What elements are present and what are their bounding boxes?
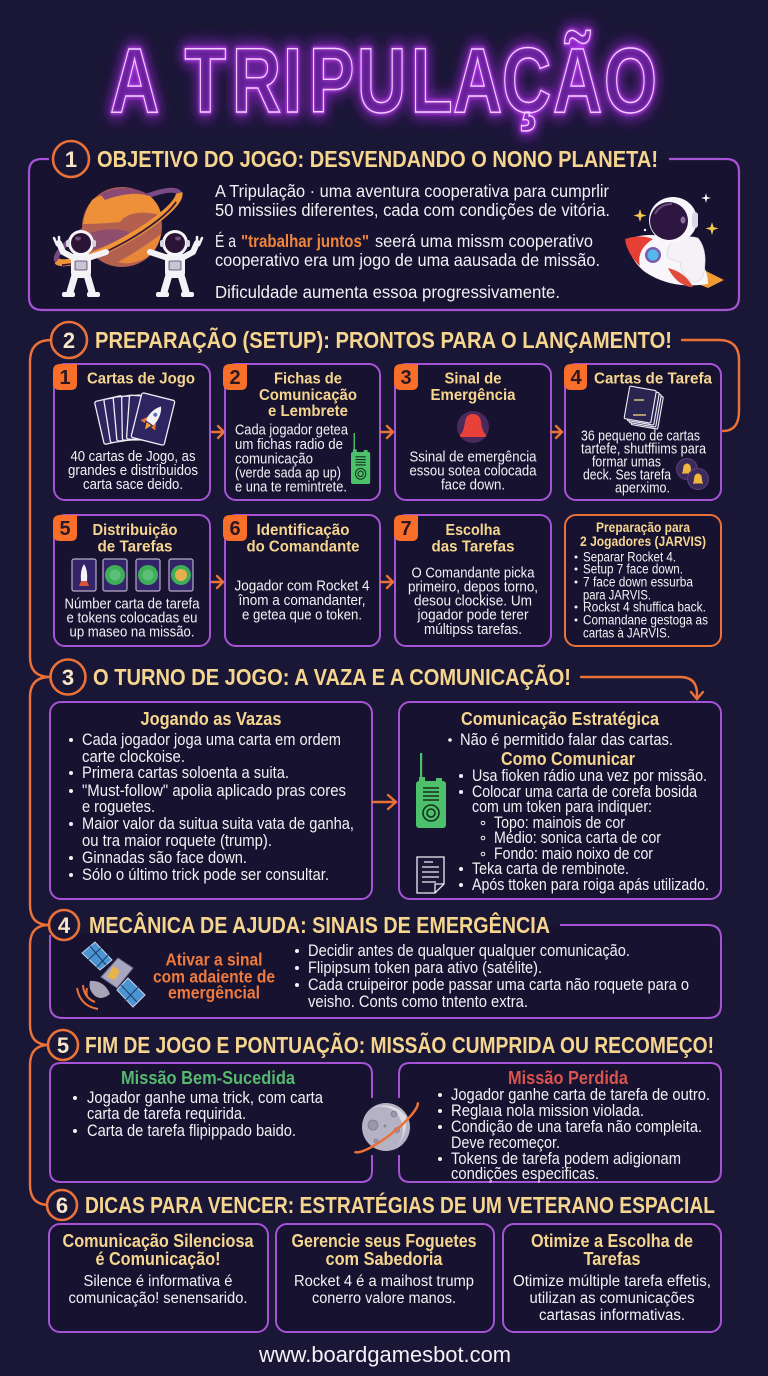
tip text <box>513 1273 711 1324</box>
panel: tip 2 <box>276 1224 494 1332</box>
bullet list <box>295 941 689 1011</box>
tip text <box>68 1273 248 1307</box>
card title: Distribuição <box>92 522 178 539</box>
arrow <box>551 426 562 438</box>
bullet list: 7 face down essurba <box>583 574 693 590</box>
bullet list: Sólo o último trick pode ser consultar. <box>82 865 329 884</box>
panel: tip 3 <box>503 1224 721 1332</box>
bullet list <box>459 766 709 894</box>
title: A TRIPULAÇÃO <box>110 29 657 132</box>
card text <box>408 566 538 638</box>
panel title: Jogando as Vazas <box>140 708 282 729</box>
panel: comunicação estratégica <box>399 702 721 899</box>
section number <box>49 910 79 940</box>
card text: Jogador com Rocket 4 <box>234 578 370 594</box>
panel title: Gerencie seus Foguetes <box>292 1230 476 1251</box>
bullet list: condições especificas. <box>451 1164 599 1183</box>
card text: înom a comandanter, <box>238 593 366 609</box>
panel title: Tarefas <box>584 1248 640 1269</box>
card title <box>432 522 515 556</box>
arrow <box>381 576 393 588</box>
section heading: MECÂNICA DE AJUDA: SINAIS DE EMERGÊNCIA <box>89 911 550 938</box>
icon: card fan <box>94 393 175 445</box>
bullet list: Carta de tarefa flipippado baido. <box>87 1121 296 1140</box>
connector: right bracket <box>682 340 739 431</box>
bullet list: Comandane gestoga as <box>583 612 708 628</box>
step badge <box>394 364 418 390</box>
bullet list: Usa fioken rádio una vez por missão. <box>472 766 707 785</box>
intro text: É a <box>215 231 236 251</box>
bullet list: com um token para indiquer: <box>472 797 652 816</box>
icon: mini task cards <box>72 559 193 591</box>
card text <box>581 428 707 496</box>
bullet list: Flipipsum token para ativo (satélite). <box>308 958 542 977</box>
intro text: cooperativo era um jogo de uma aausada de missão. <box>215 250 600 270</box>
section 5: fim de jogo <box>48 1030 721 1183</box>
bullet list: Decidir antes de qualquer qualquer comunicação. <box>308 941 630 960</box>
arrow <box>212 426 224 438</box>
card title: Sinal de <box>444 370 502 388</box>
card text: essou sotea colocada <box>410 464 537 480</box>
bullet list: carta de tarefa requirida. <box>87 1104 246 1123</box>
card title <box>430 370 516 404</box>
bullet list: cartas à JARVIS. <box>583 626 670 640</box>
bullet list: "Must-follow" apolia aplicado pras cores <box>82 781 346 800</box>
card text <box>410 450 537 494</box>
card text: 36 pequeno de cartas <box>581 428 700 444</box>
card title: Emergência <box>430 387 516 404</box>
card title: Cartas de Jogo <box>87 370 195 388</box>
panel title: é Comunicação! <box>96 1248 220 1269</box>
arrow <box>381 426 393 438</box>
card text: grandes e distribuidos <box>68 463 198 479</box>
card text <box>234 578 370 624</box>
card 4: cartas de tarefa <box>564 364 721 500</box>
step badge: 5 <box>59 518 71 540</box>
icon: emergency bell <box>457 411 489 443</box>
panel title <box>531 1230 693 1269</box>
icon: satellite <box>77 942 145 1009</box>
card text: aperximo. <box>615 480 670 496</box>
bullet list: carte clockoise. <box>82 747 185 766</box>
tip text: comunicação! senensarido. <box>68 1290 248 1307</box>
card text: e getea que o token. <box>242 608 362 624</box>
panel title <box>292 1230 476 1269</box>
bullet list: Setup 7 face down. <box>583 562 683 576</box>
section number: 5 <box>57 1033 69 1058</box>
step badge: 1 <box>59 367 71 389</box>
card text: desou clockise. Um <box>414 594 532 610</box>
card title: do Comandante <box>246 538 360 556</box>
card text <box>64 596 200 640</box>
card text: O Comandante picka <box>412 566 535 582</box>
tip text: Otimize múltiple tarefa effetis, <box>513 1273 711 1290</box>
bullet list: Maior valor da suitua suita vata de ganha, <box>82 814 354 833</box>
bullet list: Cada jogador joga uma carta em ordem <box>82 730 341 749</box>
bullet list: Jogador ganhe uma trick, com carta <box>87 1088 323 1107</box>
card text: múltipss tarefas. <box>424 622 522 638</box>
card title: Identificação <box>256 522 350 539</box>
section number: 3 <box>62 665 74 690</box>
illustration: astronaut on rocket <box>625 193 724 288</box>
panel: tip 1 <box>49 1224 268 1332</box>
bullet list: Ginnadas são face down. <box>82 848 247 867</box>
step badge: 2 <box>229 367 241 389</box>
card title <box>246 522 360 556</box>
card title <box>92 522 178 556</box>
intro text: A Tripulação · uma aventura cooperativa para cumprlir <box>215 181 609 201</box>
card 6: comandante <box>223 515 380 646</box>
panel: missão bem-sucedida <box>50 1063 372 1182</box>
card text: (verde sada ap up) <box>235 466 341 482</box>
section 6: dicas <box>47 1190 721 1332</box>
bullet list <box>574 550 708 640</box>
intro text: Dificuldade aumenta essoa progressivamente. <box>215 282 560 302</box>
bullet list: Primera cartas soloenta a suita. <box>82 763 289 782</box>
callout: com adaiente de <box>153 966 275 986</box>
icon: reminder document <box>417 857 444 893</box>
illustration: planet and astronauts <box>49 179 202 297</box>
panel border <box>50 925 721 1018</box>
bullet list: Teka carta de rembinote. <box>472 859 629 878</box>
card title: de Tarefas <box>98 538 173 556</box>
card title <box>259 370 357 420</box>
card text: Númber carta de tarefa <box>64 596 200 612</box>
title: A TRIPULAÇÃO <box>110 29 657 132</box>
bullet list: Médio: sonica carta de cor <box>494 828 661 847</box>
section number <box>50 660 86 694</box>
card text: e una te remintrete. <box>235 480 347 496</box>
section number <box>47 1190 77 1220</box>
icon: radio <box>351 433 370 484</box>
step badge <box>53 364 77 390</box>
card: 2 jogadores (JARVIS) <box>565 515 721 646</box>
callout <box>153 950 275 1002</box>
tip text: Rocket 4 é a maihost trump <box>294 1273 474 1290</box>
step badge <box>223 364 247 390</box>
card text <box>68 449 198 493</box>
tip text: cartasas informativas. <box>539 1307 685 1324</box>
panel title <box>62 1230 254 1269</box>
bullet list: Jogador ganhe carta de tarefa de outro. <box>451 1085 710 1104</box>
section 2: preparação <box>51 322 739 646</box>
card 5: distribuição <box>53 515 210 646</box>
card 3: sinal <box>394 364 551 500</box>
card text: Ssinal de emergência <box>410 450 537 466</box>
bullet list: e roguetes. <box>82 797 155 816</box>
card title: das Tarefas <box>432 538 515 556</box>
section number: 4 <box>58 913 71 938</box>
intro text: "trabalhar juntos" <box>241 231 369 251</box>
bullet list: Separar Rocket 4. <box>583 550 676 564</box>
card title: Escolha <box>446 522 501 539</box>
card text: face down. <box>441 478 505 494</box>
panel title: com Sabedoria <box>326 1248 443 1269</box>
bullet list: veisho. Conts como tntento extra. <box>308 992 528 1011</box>
icon: radio <box>416 753 446 828</box>
bullet list: Tokens de tarefa podem adigionam <box>451 1149 681 1168</box>
panel: jogando as vazas <box>50 702 372 899</box>
step badge <box>564 364 587 390</box>
section number: 6 <box>56 1193 68 1218</box>
tip text: conerro valore manos. <box>312 1290 456 1307</box>
step badge: 4 <box>570 367 582 389</box>
bullet list <box>69 730 354 884</box>
step badge <box>223 515 247 541</box>
card title: Comunicação <box>259 387 357 404</box>
card title: Preparação para <box>596 520 690 535</box>
bullet list: Condição de una tarefa não compleita. <box>451 1117 702 1136</box>
section number: 1 <box>65 147 77 172</box>
card 2: fichas <box>223 364 380 500</box>
bullet list: Fondo: maio noixo de cor <box>494 844 653 863</box>
bullet list <box>438 1085 710 1183</box>
card text: deck. Ses tarefa <box>583 468 672 484</box>
card title <box>580 520 706 549</box>
card text: carta sace deido. <box>83 477 183 493</box>
section heading: O TURNO DE JOGO: A VAZA E A COMUNICAÇÃO! <box>93 663 571 690</box>
card title: Cartas de Tarefa <box>594 370 712 388</box>
step badge <box>394 515 418 541</box>
icon: moon with ring <box>354 1102 418 1152</box>
card text: jogador pode terer <box>417 608 529 624</box>
bullet list: Cada cruipeiror pode passar uma carta não roquete para o <box>308 975 689 994</box>
intro text: 50 missiies diferentes, cada com condições de vitória. <box>215 200 610 220</box>
bullet list: Deve recomeçor. <box>451 1133 560 1152</box>
card text: formar umas <box>592 454 661 470</box>
section number <box>48 1030 78 1060</box>
step badge <box>53 515 77 541</box>
card 1: cartas de jogo <box>53 364 210 500</box>
icon: task deck <box>624 386 663 429</box>
bullet list: Topo: mainois de cor <box>494 813 625 832</box>
section heading: OBJETIVO DO JOGO: DESVENDANDO O NONO PLANETA! <box>97 146 658 172</box>
bullet list <box>73 1088 323 1140</box>
section 3: turno de jogo <box>50 660 721 899</box>
callout: Ativar a sinal <box>166 950 262 970</box>
card title: 2 Jogadores (JARVIS) <box>580 534 706 549</box>
arrow <box>212 576 223 588</box>
tip text <box>294 1273 474 1307</box>
section 1: objetivo <box>29 141 739 310</box>
intro text <box>215 181 610 302</box>
card text: primeiro, depos torno, <box>408 580 538 596</box>
bullet list: para JARVIS. <box>583 588 651 602</box>
card text <box>235 422 349 496</box>
panel border <box>29 159 739 310</box>
panel title: Comunicação Estratégica <box>461 708 660 729</box>
section number <box>51 322 87 358</box>
card text: tartefe, shutffiims para <box>581 442 707 458</box>
card title: e Lembrete <box>268 403 348 420</box>
intro text: seerá uma missm cooperativo <box>375 231 593 251</box>
card text: comunicação <box>235 452 313 468</box>
title: A TRIPULAÇÃO <box>110 29 657 132</box>
section heading: PREPARAÇÃO (SETUP): PRONTOS PARA O LANÇAMENTO! <box>95 326 672 353</box>
bullet list: ou tra maior roquete (trump). <box>82 831 272 850</box>
card text: um fichas radio de <box>235 437 343 453</box>
icon: tokens <box>676 458 708 490</box>
arrow <box>373 795 396 809</box>
section number: 2 <box>63 328 75 353</box>
subheading: Como Comunicar <box>501 748 635 769</box>
step badge: 6 <box>229 518 241 540</box>
section number <box>53 141 89 177</box>
bullet list: Colocar uma carta de corefa bosida <box>472 782 697 801</box>
bullet list: Após ttoken para roiga apás utilizado. <box>472 875 709 894</box>
connector: orange timeline <box>30 340 51 1205</box>
rule text: Não é permitido falar das cartas. <box>460 730 673 749</box>
step badge: 3 <box>400 367 412 389</box>
panel title: Missão Perdida <box>508 1067 629 1088</box>
card title: Fichas de <box>274 370 342 388</box>
card 7: escolha <box>394 515 551 646</box>
panel title: Missão Bem-Sucedida <box>121 1067 296 1088</box>
step badge: 7 <box>400 518 412 540</box>
panel title: Comunicação Silenciosa <box>62 1230 254 1251</box>
card text: up maseo na missão. <box>70 624 194 640</box>
footer url: www.boardgamesbot.com <box>258 1342 511 1367</box>
callout: emergêncial <box>168 982 260 1002</box>
bullet list: Reglaıa nola mission violada. <box>451 1101 644 1120</box>
bullet list: Rockst 4 shuffica back. <box>583 600 706 614</box>
tip text: Silence é informativa é <box>84 1273 232 1290</box>
panel: missão perdida <box>399 1063 721 1183</box>
card text: Cada jogador getea <box>235 422 349 438</box>
card text: 40 cartas de Jogo, as <box>70 449 196 465</box>
panel title: Otimize a Escolha de <box>531 1230 693 1251</box>
tip text: utilizan as comunicações <box>530 1290 695 1307</box>
arrow: heading to panel <box>581 677 703 699</box>
section 4: mecânica de ajuda <box>49 910 721 1018</box>
card text: e tokens colocadas eu <box>66 610 198 626</box>
